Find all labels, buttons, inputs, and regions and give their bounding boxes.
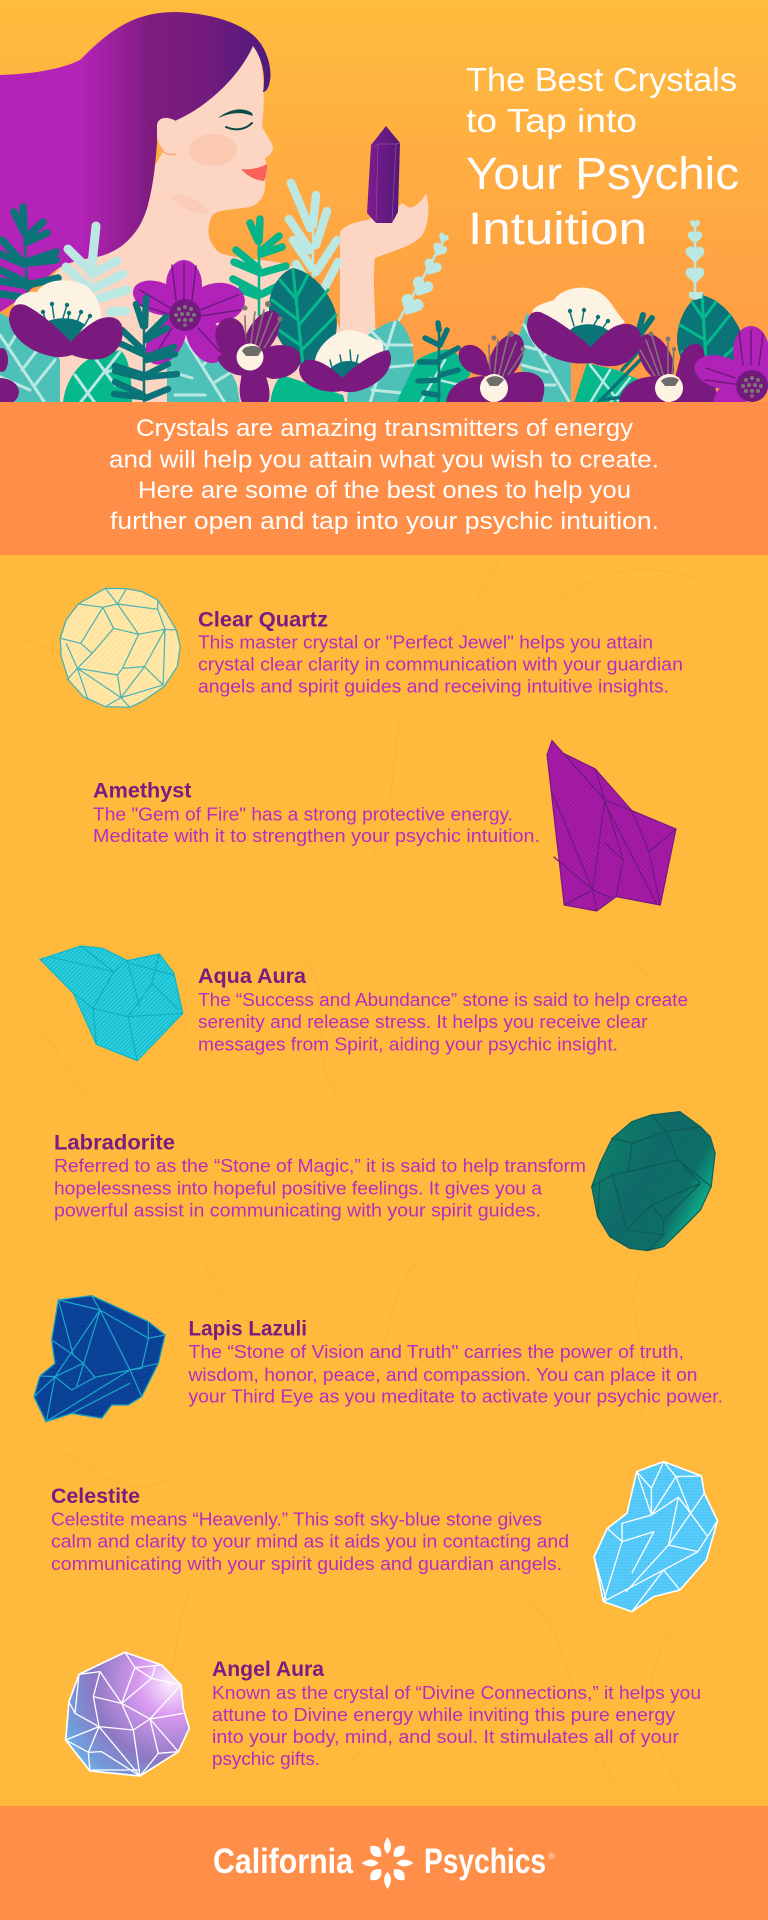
flower: purple right 2 with stamens (619, 328, 718, 403)
title: to Tap into (466, 102, 637, 139)
heading: Angel Aura (212, 1658, 324, 1681)
description: into your body, mind, and soul. It stimulates all of your (212, 1726, 679, 1747)
description: Referred to as the “Stone of Magic,” it is said to help transform (54, 1155, 586, 1176)
crystal: lapis lazuli (34, 1296, 165, 1422)
description: psychic gifts. (212, 1748, 320, 1769)
crystal: aqua aura (40, 946, 183, 1061)
intro text: Crystals are amazing transmitters of energy (136, 415, 634, 442)
intro text: Here are some of the best ones to help you (138, 477, 631, 504)
title: Intuition (468, 203, 647, 254)
description: your Third Eye as you meditate to activate your psychic power. (188, 1386, 723, 1406)
hero gradient background (0, 0, 768, 403)
item: Angel Aura (66, 1652, 701, 1776)
description (187, 1341, 723, 1406)
leaf: green right (574, 350, 660, 403)
flower: cream and purple centre (299, 330, 391, 392)
flower: purple edge fragments (0, 348, 19, 406)
leaf: teal right (516, 313, 571, 403)
fern: teal foreground (114, 298, 177, 403)
registered mark: ® (548, 1851, 555, 1861)
crystal: amethyst (547, 741, 676, 911)
heading: Amethyst (93, 780, 192, 802)
item: Amethyst (93, 741, 676, 911)
fern: light centre (289, 183, 338, 320)
description: The “Success and Abundance” stone is said to help create (198, 989, 688, 1010)
woman figure (0, 12, 428, 402)
item: Lapis Lazuli (34, 1296, 723, 1422)
description (198, 989, 688, 1054)
hero illustration panel (0, 0, 768, 424)
leaf: teal centre-right (347, 320, 414, 403)
fern: teal top left (0, 207, 58, 300)
item: Clear Quartz (60, 588, 683, 707)
background texture veins (20, 560, 740, 1790)
leaf: dark teal right (677, 295, 743, 395)
logo icon: star burst (362, 1837, 414, 1889)
intro text: further open and tap into your psychic intuition. (110, 508, 659, 535)
description: serenity and release stress. It helps you receive clear (198, 1011, 648, 1032)
description (93, 804, 540, 846)
description: Known as the crystal of “Divine Connections,” it helps you (212, 1682, 701, 1703)
item: Celestite (51, 1462, 718, 1612)
description: Meditate with it to strengthen your psychic intuition. (93, 825, 540, 846)
description: wisdom, honor, peace, and compassion. You can place it on (187, 1364, 698, 1385)
fern: green centre (233, 219, 286, 315)
fern: light left (66, 226, 127, 312)
fern: teal right (418, 323, 458, 403)
ear shadow (160, 147, 176, 155)
heading: Aqua Aura (198, 965, 306, 988)
description: The “Stone of Vision and Truth" carries the power of truth, (188, 1341, 684, 1362)
hair (0, 12, 270, 312)
item: Aqua Aura (40, 946, 688, 1061)
hand-held crystal (367, 126, 400, 223)
flower: purple left with stamens (215, 301, 300, 403)
crystal: clear quartz (60, 588, 180, 707)
crystal: labradorite (592, 1112, 715, 1251)
logo text: California: California (213, 1842, 353, 1881)
flower: magenta centre (128, 260, 248, 372)
description: communicating with your spirit guides and guardian angels. (51, 1553, 562, 1574)
description: hopelessness into hopeful positive feelings. It gives you a (54, 1178, 543, 1198)
leaf: teal far left (0, 313, 60, 403)
description (51, 1508, 569, 1574)
heading: Celestite (51, 1485, 140, 1508)
leaf: teal centre-left (167, 340, 240, 403)
ear (157, 118, 177, 155)
crystal: angel aura (66, 1652, 189, 1776)
woman's body and neck (40, 45, 340, 402)
crystal: celestite (594, 1462, 718, 1612)
title (466, 61, 739, 254)
leaf: green right of centre (396, 349, 470, 403)
item: Labradorite (54, 1112, 715, 1251)
flower: magenta right (691, 326, 768, 424)
heading: Lapis Lazuli (188, 1318, 307, 1340)
leaf: dark teal centre (269, 268, 337, 366)
hand and arm (340, 193, 428, 402)
description: powerful assist in communicating with your spirit guides. (54, 1200, 541, 1220)
closed eye (226, 123, 252, 129)
description: angels and spirit guides and receiving intuitive insights. (198, 676, 669, 696)
flower: cream and purple left (9, 280, 123, 360)
intro text: and will help you attain what you wish to create. (109, 446, 659, 474)
vine: light hearts centre (396, 232, 450, 320)
leaf: green centre bottom (270, 375, 345, 403)
description: The "Gem of Fire" has a strong protective energy. (93, 804, 513, 824)
description: attune to Divine energy while inviting this pure energy (212, 1704, 676, 1725)
flower: purple right 1 with stamens (446, 328, 544, 403)
title: Your Psychic (466, 148, 739, 199)
blush (189, 134, 237, 166)
description (212, 1682, 701, 1769)
description (54, 1155, 586, 1220)
description: Celestite means “Heavenly.” This soft sky-blue stone gives (51, 1508, 542, 1530)
intro band (0, 402, 768, 555)
flower: cream and purple right (527, 288, 652, 366)
page background (0, 400, 768, 1920)
logo text: Psychics: Psychics (424, 1842, 546, 1881)
leaf: green left (63, 350, 132, 403)
description: calm and clarity to your mind as it aids you in contacting and (51, 1530, 569, 1552)
heading: Clear Quartz (198, 608, 328, 632)
heading: Labradorite (54, 1132, 175, 1154)
mouth (241, 164, 267, 181)
vine: light hearts right (686, 220, 704, 300)
description: crystal clear clarity in communication with your guardian (198, 654, 683, 674)
description: messages from Spirit, aiding your psychic insight. (198, 1034, 618, 1054)
eyebrow (218, 109, 253, 118)
neck shading (169, 190, 211, 218)
description: This master crystal or "Perfect Jewel" helps you attain (198, 632, 653, 652)
intro text (109, 415, 659, 535)
footer band (0, 1806, 768, 1920)
title: The Best Crystals (466, 61, 737, 98)
description (198, 632, 683, 696)
